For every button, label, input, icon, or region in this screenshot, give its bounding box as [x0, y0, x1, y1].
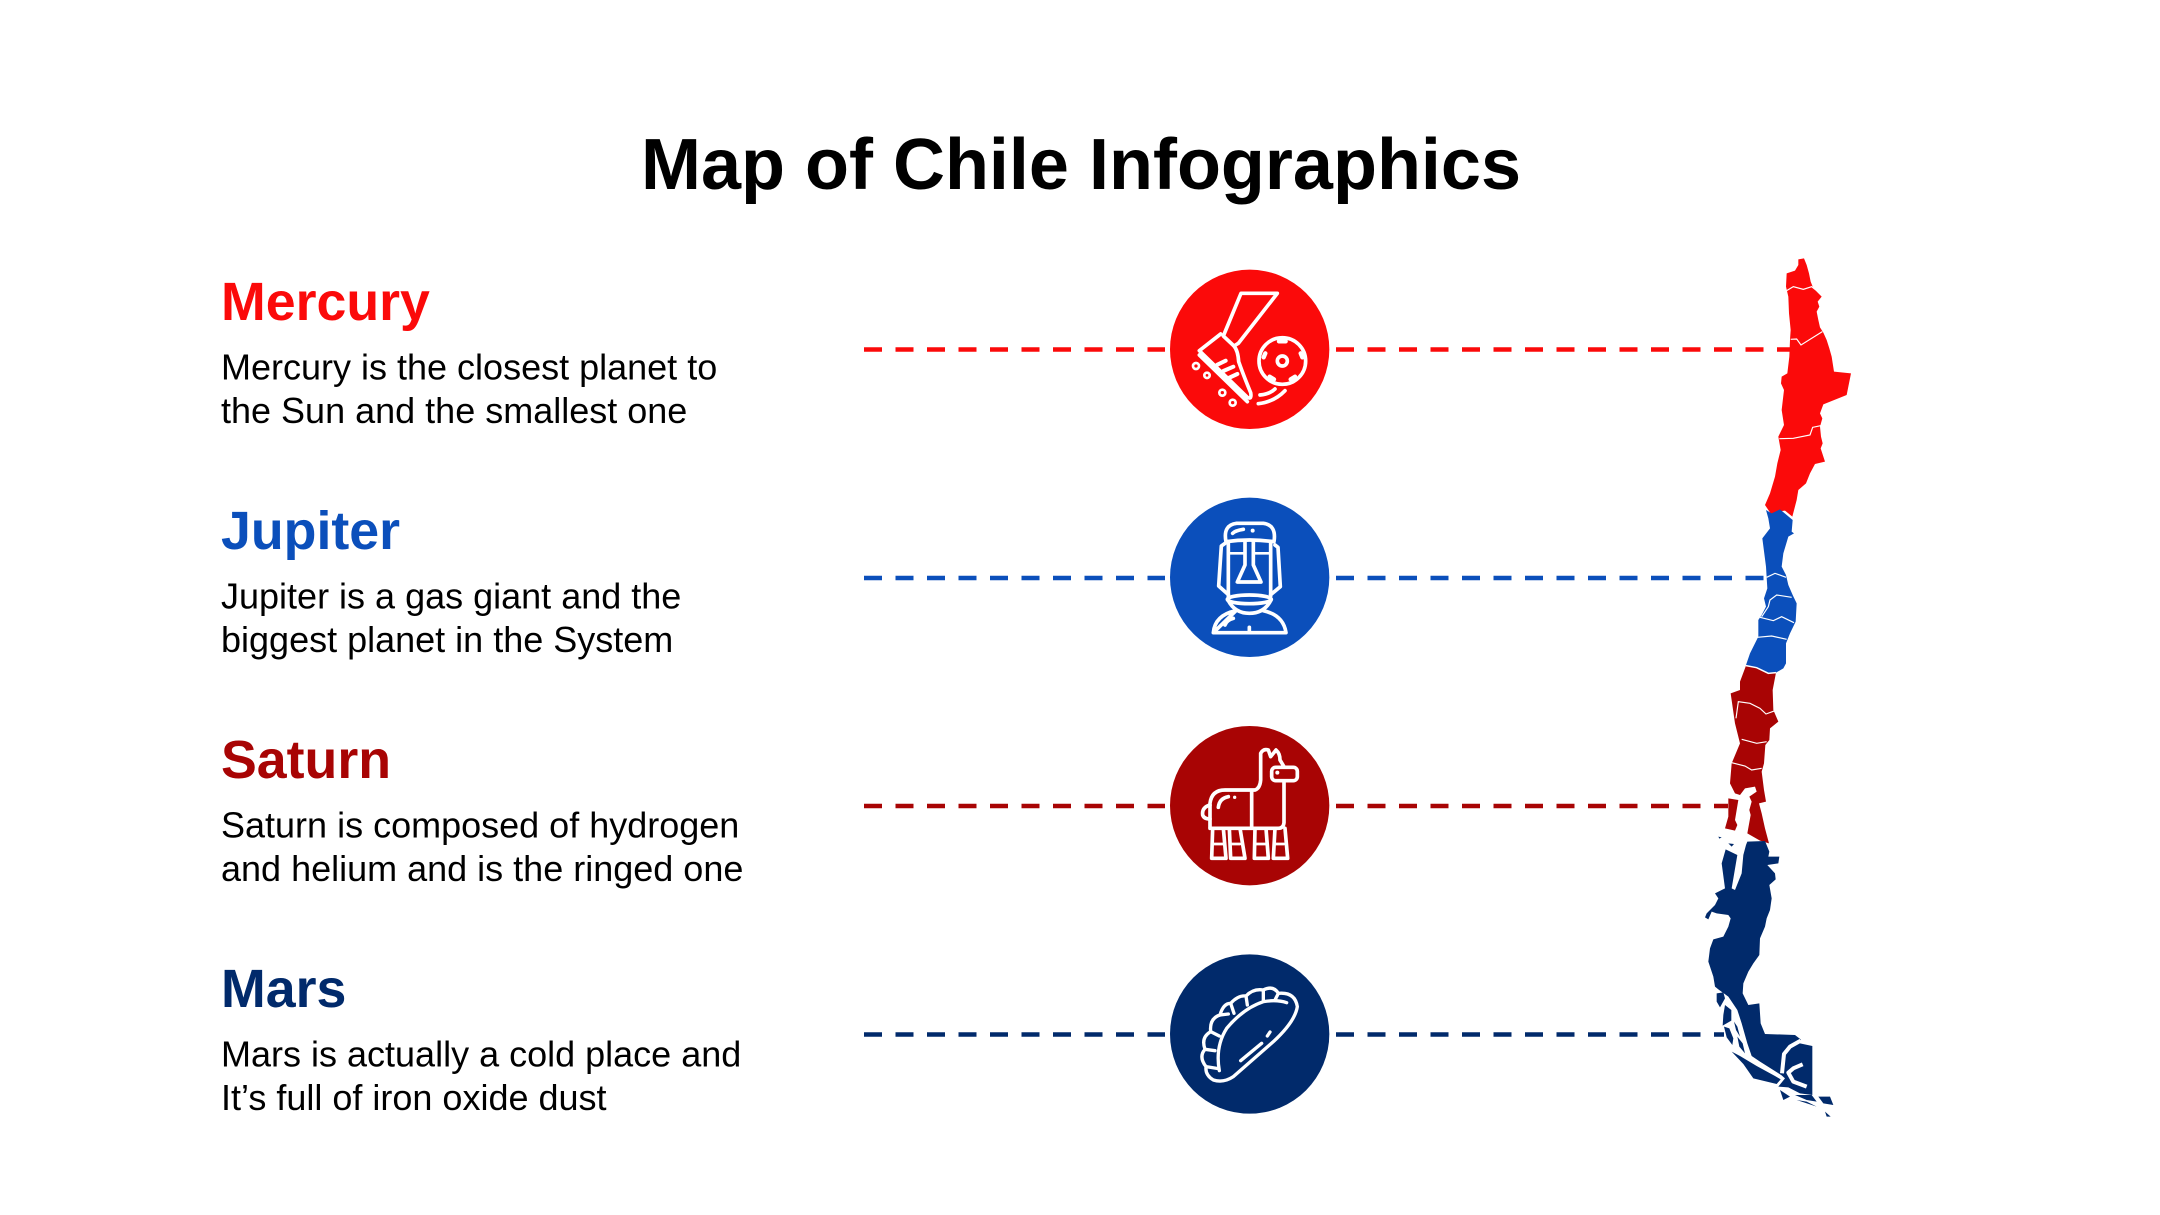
text block: Jupiter description: biggest planet in the System — [221, 619, 673, 660]
icon: llama — [1170, 726, 1329, 885]
heading: Saturn: Saturn — [221, 730, 391, 790]
text block: Mars description: It’s full of iron oxide dust — [221, 1077, 607, 1118]
panel: Jupiter text — [221, 501, 681, 660]
map region: centre-south (dark red) — [1725, 666, 1778, 843]
title: Map of Chile Infographics — [641, 125, 1521, 205]
heading: Mars: Mars — [221, 959, 346, 1019]
panel: Mars text — [221, 959, 741, 1118]
text block: Saturn description: and helium and is the ringed one — [221, 848, 743, 889]
heading: Jupiter: Jupiter — [221, 501, 400, 561]
dashed connector: Saturn — [864, 804, 1728, 808]
text block: Jupiter description: Jupiter is a gas giant and the — [221, 576, 681, 616]
map region: south (navy) — [1705, 837, 1833, 1117]
map region: north (red) — [1765, 258, 1851, 517]
panel: Mercury text — [221, 272, 717, 431]
text block: Mars description: Mars is actually a cold place and — [221, 1034, 741, 1074]
dashed connector: Mercury — [864, 347, 1790, 352]
text block: Mercury description: the Sun and the smallest one — [221, 390, 687, 431]
panel: Saturn text — [221, 730, 743, 889]
icon: moai head — [1170, 498, 1329, 657]
heading: Mercury: Mercury — [221, 272, 430, 332]
dashed connector: Mars — [864, 1032, 1724, 1037]
map region: centre-north (blue) — [1746, 509, 1797, 673]
map of Chile — [1705, 258, 1851, 1117]
dashed connector: Jupiter — [864, 576, 1767, 580]
icon: football boot and ball — [1170, 270, 1329, 429]
text block: Saturn description: Saturn is composed of hydrogen — [221, 804, 739, 846]
text block: Mercury description: Mercury is the closest planet to — [221, 346, 717, 388]
icon: empanada — [1170, 954, 1329, 1114]
